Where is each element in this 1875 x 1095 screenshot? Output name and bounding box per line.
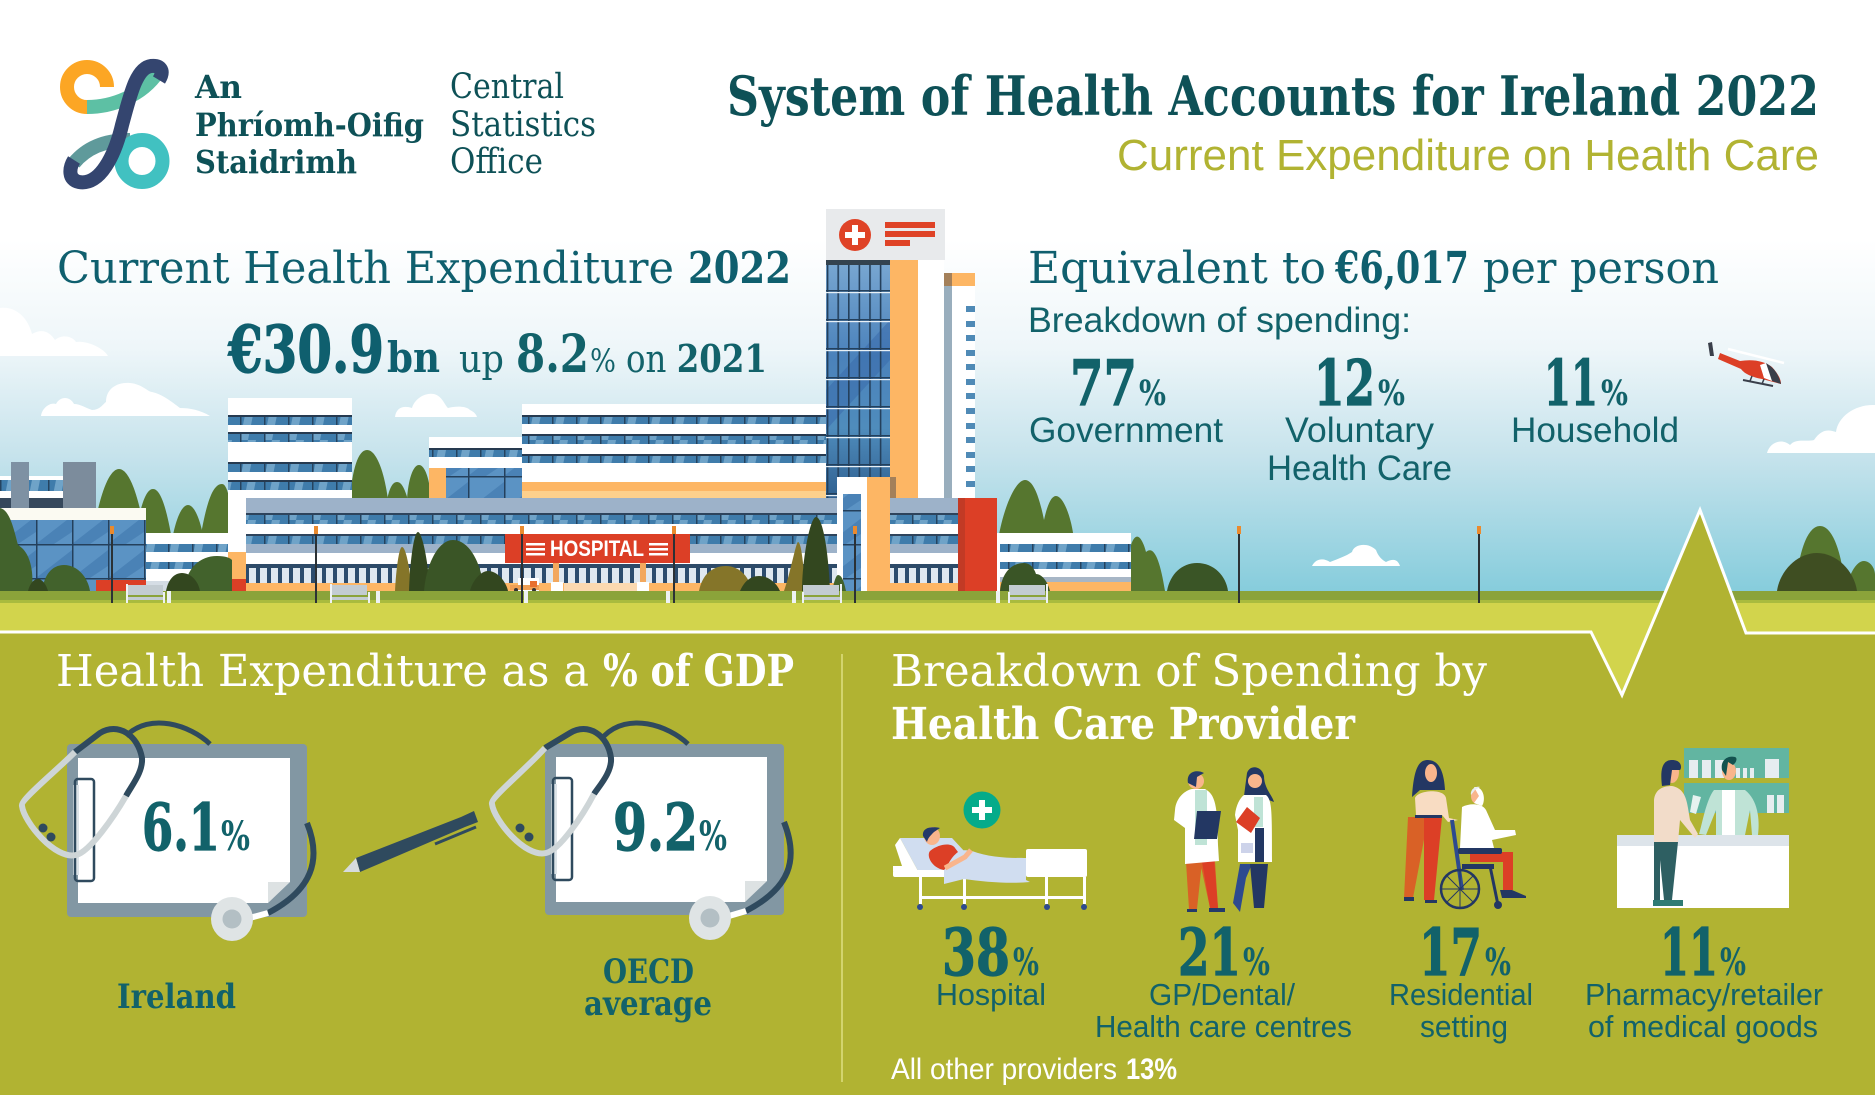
stat: voluntary health care 12%: %: [1378, 373, 1405, 414]
logo wordmark: Irish: [194, 68, 424, 181]
stat: pharmacy 11%: %: [1720, 940, 1746, 984]
stat: voluntary health care 12%: 12: [1314, 346, 1375, 420]
logo wordmark: English: [450, 67, 596, 182]
stat: residential setting 17%: 17: [1419, 915, 1482, 991]
stat: household 11%: %: [1601, 373, 1628, 414]
building: main upper block: [522, 404, 827, 499]
building: entrance tower: [837, 477, 896, 591]
value: 6.1%: 6.1: [142, 790, 220, 866]
stat: total expenditure: 8.2: [516, 324, 589, 385]
icon: doctors: [1174, 767, 1274, 912]
illustration: hospital buildings: [0, 209, 1131, 591]
logo wordmark: English: Statistics: [450, 105, 596, 145]
stat: residential setting 17%: Residential: [1389, 977, 1533, 1012]
building: hospital tower: [826, 260, 975, 500]
hospital sign: [505, 534, 690, 563]
heading: current health expenditure: 2022: [688, 243, 791, 294]
stat: hospital 38%: [936, 915, 1046, 1012]
stat: total expenditure: bn: [387, 333, 440, 382]
ground: [0, 591, 1875, 703]
lower panel with heartbeat line: [0, 510, 1875, 1095]
label: OECD average: OECD: [603, 952, 694, 992]
logo: Central Statistics Office: [67, 66, 596, 182]
building: far left block: [0, 462, 96, 510]
cloud: far right: [1767, 405, 1875, 453]
value: 9.2%: 9.2: [613, 790, 698, 866]
logo wordmark: English: Office: [450, 142, 543, 182]
heading: per person: [1028, 243, 1719, 294]
icon: ambulance: [510, 578, 539, 592]
icon: helicopter: [1708, 342, 1784, 386]
logo mark: [67, 66, 162, 182]
building: middle block: [429, 437, 522, 499]
heading: current health expenditure: Current Health Expenditure: [57, 243, 674, 294]
clipboard: OECD average 9.2%: [492, 723, 791, 940]
stat: total expenditure: %: [590, 342, 616, 380]
stat: residential setting 17%: [1389, 915, 1533, 1044]
stat: total expenditure: [227, 312, 767, 388]
building: right wing: [997, 533, 1131, 591]
heading: health expenditure as % of GDP: Health Expenditure as a: [56, 646, 589, 697]
value: 6.1%: %: [221, 813, 250, 860]
icon: pen: [343, 811, 478, 872]
stat: total expenditure: €30.9: [227, 312, 384, 388]
stat: hospital 38%: %: [1013, 940, 1039, 984]
stat: household 11%: 11: [1544, 346, 1598, 420]
street lamps: [110, 526, 1481, 603]
heading: per person: €6,017: [1334, 243, 1469, 294]
cloud: left centre: [41, 383, 210, 416]
stat: government 77%: [1029, 346, 1223, 450]
label: OECD average: [584, 952, 712, 1024]
clipboard: Ireland 6.1%: [22, 723, 314, 941]
divider: [841, 654, 843, 1082]
stat: government 77%: Government: [1029, 411, 1223, 450]
building: side wing: [146, 533, 228, 591]
stat: household 11%: Household: [1511, 411, 1679, 450]
building: left glass pavilion: [0, 508, 152, 591]
stat: GP/Dental/Health care centres 21%: Health care centres: [1095, 1009, 1352, 1044]
stat: GP/Dental/Health care centres 21%: %: [1243, 940, 1270, 984]
value: 9.2%: %: [699, 813, 727, 860]
background: sky: [0, 240, 1875, 600]
stat: government 77%: 77: [1070, 346, 1137, 420]
stat: voluntary health care 12%: Voluntary: [1285, 411, 1435, 450]
cloud: far left: [0, 308, 108, 356]
label: OECD average: average: [584, 984, 712, 1024]
stat: total expenditure: on 2021: [626, 336, 767, 381]
text: all other providers: All other providers: [891, 1053, 1117, 1086]
subtitle: Current Expenditure on Health Care: [1117, 131, 1819, 180]
stat: GP/Dental/Health care centres 21%: GP/Dental/: [1149, 977, 1295, 1012]
text: breakdown of spending: Breakdown of spending:: [1028, 301, 1411, 340]
stat: GP/Dental/Health care centres 21%: 21: [1178, 915, 1241, 991]
stat: government 77%: %: [1139, 373, 1166, 414]
hospital sign: HOSPITAL: [550, 536, 644, 561]
heading: health expenditure as % of GDP: % of GDP: [603, 646, 794, 697]
stat: total expenditure: up: [459, 337, 504, 381]
trees behind hospital: [92, 450, 1875, 595]
heading: per person: per person: [1483, 243, 1719, 294]
cloud: by tall building: [395, 394, 477, 417]
front planting: [0, 508, 1857, 591]
logo wordmark: Irish: Staidrimh: [195, 143, 357, 181]
stat: residential setting 17%: setting: [1420, 1009, 1508, 1044]
heading: breakdown by provider: [891, 646, 1487, 750]
stat: residential setting 17%: %: [1485, 940, 1511, 984]
icon: carer with wheelchair user: [1404, 760, 1526, 909]
stat: voluntary health care 12%: Health Care: [1267, 449, 1452, 488]
hospital tower rooftop sign: [826, 209, 945, 260]
stat: pharmacy 11%: 11: [1660, 915, 1718, 991]
text: all other providers: 13%: [1126, 1053, 1177, 1086]
hospital entrance steps: [551, 563, 649, 591]
cloud: small right: [1312, 545, 1400, 566]
stat: pharmacy 11%: of medical goods: [1588, 1009, 1818, 1044]
stat: GP/Dental/Health care centres 21%: [1095, 915, 1352, 1044]
stat: hospital 38%: Hospital: [936, 977, 1046, 1012]
building: main lower block: [228, 498, 958, 591]
stat: voluntary health care 12%: [1267, 346, 1452, 488]
logo wordmark: Irish: Phríomh-Oifig: [195, 106, 424, 144]
stat: pharmacy 11%: Pharmacy/retailer: [1585, 977, 1823, 1012]
icon: patient in hospital bed: [893, 792, 1087, 910]
building: left tall block: [228, 398, 352, 500]
stat: hospital 38%: 38: [942, 915, 1010, 991]
building: red wing: [958, 498, 997, 591]
logo wordmark: Irish: An: [194, 68, 242, 106]
heading: breakdown by provider: Breakdown of Spending by: [891, 646, 1487, 697]
stat: household 11%: [1511, 346, 1679, 450]
heading: per person: Equivalent to: [1028, 243, 1326, 294]
logo wordmark: English: Central: [450, 67, 564, 107]
stat: pharmacy 11%: [1585, 915, 1823, 1044]
park benches: [126, 584, 1048, 603]
label: Ireland: Ireland: [117, 977, 236, 1017]
icon: pharmacy counter: [1617, 748, 1789, 908]
heading: breakdown by provider: Health Care Provider: [891, 699, 1356, 750]
